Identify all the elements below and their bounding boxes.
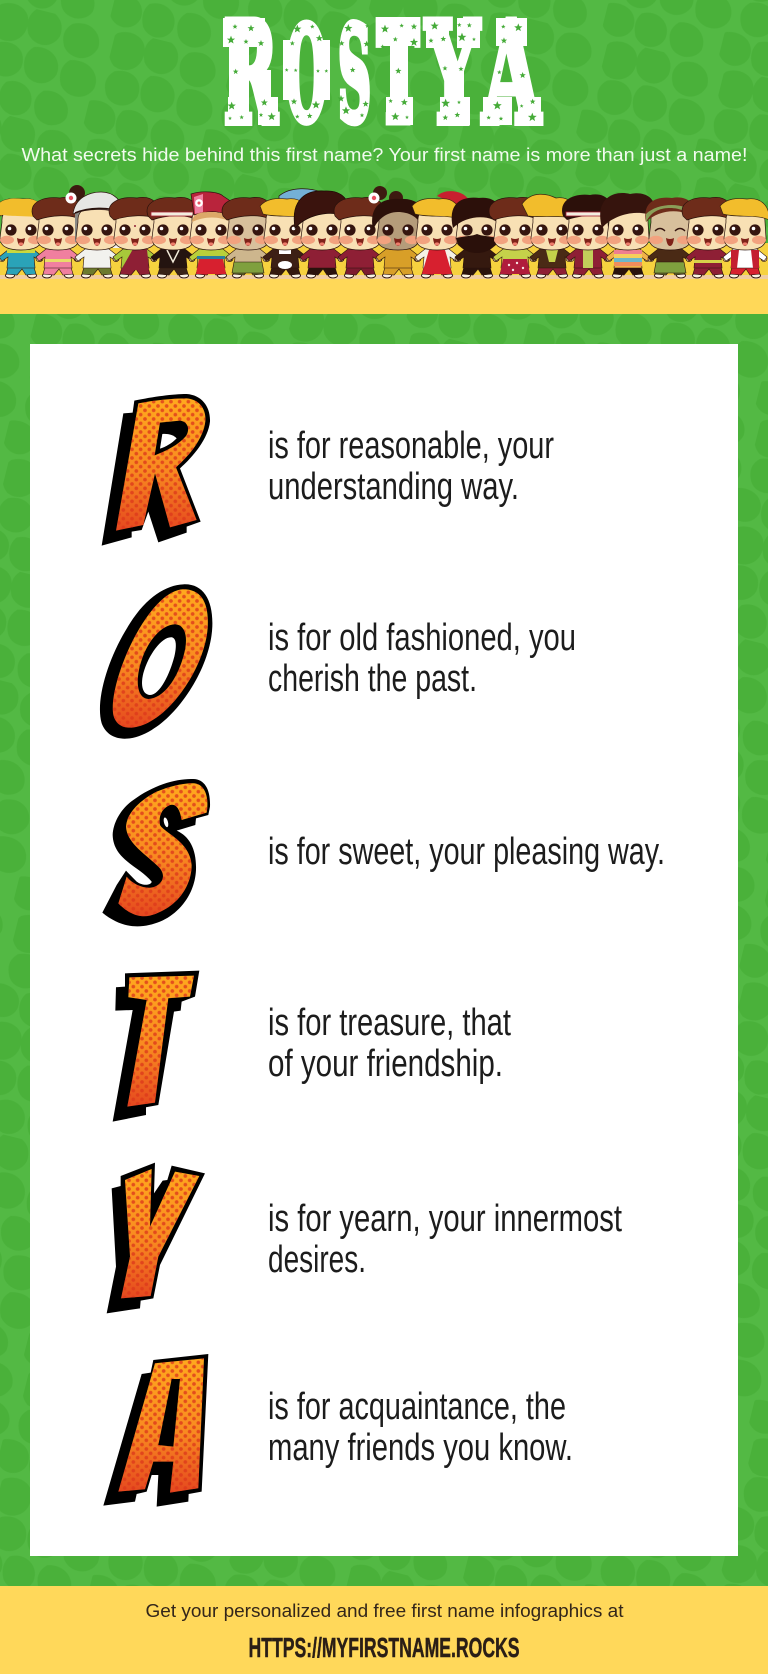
title: ROSTYA: O — [286, 0, 327, 151]
statement for Y — [268, 1198, 622, 1281]
child: tan skin with grass skirt — [222, 197, 273, 278]
child: black beard and robe — [452, 198, 502, 278]
child: red hat and skirt — [189, 192, 235, 278]
statement for A: is for acquaintance, the — [268, 1386, 566, 1428]
statement for Y: desires. — [268, 1239, 366, 1281]
child: polka dot skirt — [489, 197, 540, 278]
child: green hat, grass skirt — [645, 197, 695, 278]
statement for A — [268, 1386, 573, 1469]
statement for R: is for reasonable, your — [268, 425, 554, 467]
letter T — [113, 971, 199, 1122]
yellow ground band — [0, 243, 768, 314]
panel: white letters panel — [30, 344, 738, 1556]
child: white headdress — [73, 192, 123, 278]
statement for R — [268, 425, 554, 508]
footer band — [0, 1586, 768, 1674]
child: black outfit with band — [147, 197, 198, 278]
child: rainbow striped shirt — [600, 193, 655, 278]
statement for O — [268, 617, 576, 700]
title: ROSTYA — [223, 0, 542, 157]
letter R — [102, 394, 210, 546]
statement for O: cherish the past. — [268, 658, 477, 700]
statement for O: is for old fashioned, you — [268, 617, 576, 659]
child: blond, red and white dress — [720, 199, 768, 278]
child: pink kimono — [32, 185, 85, 278]
child: blond, brown vest — [522, 194, 576, 278]
child: dark skin, ochre dress — [372, 191, 424, 278]
statement for Y: is for yearn, your innermost — [268, 1198, 622, 1240]
child: blue overalls — [0, 199, 45, 278]
subtitle: What secrets hide behind this first name? Your first name is more than just a name! — [22, 145, 748, 165]
letter Y — [107, 1163, 205, 1313]
child: flower in hair, maroon robe — [334, 186, 387, 278]
statement for T: of your friendship. — [268, 1043, 503, 1085]
footer url: HTTPS://MYFIRSTNAME.ROCKS — [248, 1632, 520, 1663]
footer call to action: Get your personalized and free first name infographics at — [146, 1600, 624, 1621]
child: blond, red dress — [412, 191, 469, 278]
child: blond with blue cap — [260, 189, 321, 278]
row of cartoon children — [0, 185, 768, 278]
statement for T — [268, 1002, 511, 1085]
statement for R: understanding way. — [268, 466, 519, 508]
letter A — [103, 1354, 208, 1507]
statement for A: many friends you know. — [268, 1427, 573, 1469]
letter S — [102, 779, 210, 926]
statement for T: is for treasure, that — [268, 1002, 511, 1044]
title: ROSTYA: S — [338, 0, 371, 151]
child: green and maroon robe — [109, 197, 160, 278]
child: tall dark hair, maroon suit — [294, 191, 349, 278]
child: maroon outfit, crossed plaster — [682, 197, 733, 278]
letter O — [100, 584, 212, 739]
child: band, maroon and green robe — [562, 194, 613, 278]
